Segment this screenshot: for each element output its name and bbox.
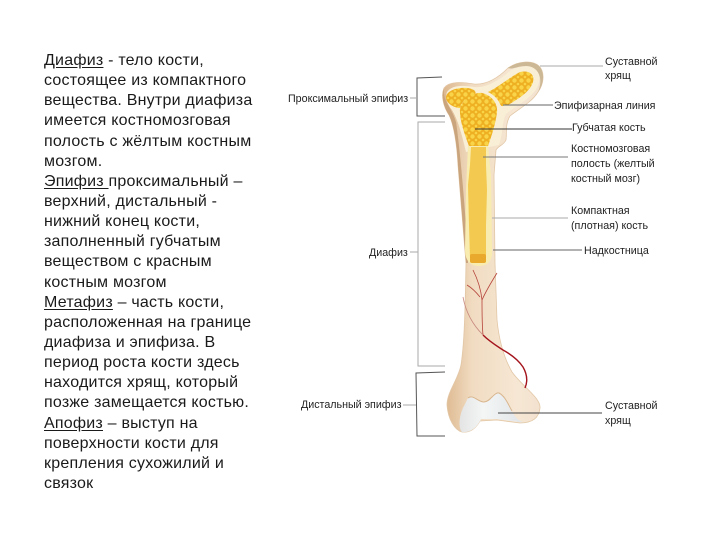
text block: bone part definitions: верхний, дистальный - <box>44 193 217 210</box>
text block: bone part definitions: вещества. Внутри диафиза <box>44 92 252 109</box>
text block: bone part definitions: расположенная на границе <box>44 314 251 331</box>
label: distal epiphysis: Дистальный эпифиз <box>301 399 402 411</box>
spongy bone: right lobe <box>488 71 533 106</box>
text block: bone part definitions: крепления сухожилий и <box>44 455 224 472</box>
articular cartilage distal <box>460 393 527 432</box>
leader lines <box>403 66 603 413</box>
text block: bone part definitions: позже замещается костью. <box>44 394 249 411</box>
label: periosteum: Надкостница <box>584 245 649 257</box>
label: medullary cavity: Костномозговая <box>571 143 650 155</box>
text block: bone part definitions: веществом с красным <box>44 253 212 270</box>
text block: bone part definitions <box>44 52 252 492</box>
marrow end <box>470 254 486 263</box>
left branch <box>467 285 480 297</box>
bracket: proximal epiphysis <box>417 77 445 116</box>
label: proximal epiphysis: Проксимальный эпифиз <box>288 93 408 105</box>
pale head interior <box>446 66 539 152</box>
text block: bone part definitions: состоящее из компактного <box>44 72 246 89</box>
label: diaphysis: Диафиз <box>369 247 408 259</box>
label: articular cartilage top: хрящ <box>605 70 631 82</box>
cartilage edge <box>468 393 512 411</box>
text block: bone part definitions: поверхности кости для <box>44 435 219 452</box>
text block: bone part definitions: Диафиз - тело кости, <box>44 52 204 69</box>
outer bone silhouette <box>443 62 543 432</box>
label: compact bone: (плотная) кость <box>571 220 648 232</box>
labels <box>288 56 658 427</box>
label: spongy bone: Губчатая кость <box>572 122 646 134</box>
blood vessels <box>463 270 527 388</box>
label: medullary cavity: полость (желтый <box>571 158 655 170</box>
spongy bone: central mass <box>460 93 497 150</box>
text block: bone part definitions: полость с жёлтым костным <box>44 133 251 150</box>
text block: bone part definitions: имеется костномозговая <box>44 112 231 129</box>
bone body <box>443 62 543 432</box>
bracket: diaphysis <box>418 122 445 366</box>
text block: bone part definitions: Апофиз – выступ на <box>44 415 198 432</box>
label: articular cartilage bottom: хрящ <box>605 415 631 427</box>
right branch <box>482 273 497 300</box>
text block: bone part definitions: заполненный губчатым <box>44 233 221 250</box>
bracket: distal epiphysis <box>416 372 445 436</box>
text block: bone part definitions: период роста кости здесь <box>44 354 240 371</box>
cortical wall shading <box>443 88 468 263</box>
text block: bone part definitions: диафиза и эпифиза. В <box>44 334 215 351</box>
label: compact bone: Компактная <box>571 205 630 217</box>
text block: bone part definitions: Метафиз – часть кости, <box>44 294 224 311</box>
medullary cavity pale zone <box>465 146 492 266</box>
text block: bone part definitions: нижний конец кости, <box>44 213 200 230</box>
yellow marrow <box>468 147 487 258</box>
text block: bone part definitions: находится хрящ, который <box>44 374 238 391</box>
label: medullary cavity: костный мозг) <box>571 173 640 185</box>
label: articular cartilage bottom: Суставной <box>605 400 658 412</box>
spongy bone: left lobe <box>446 88 476 108</box>
text block: bone part definitions: мозгом. <box>44 153 102 170</box>
label: articular cartilage top: Суставной <box>605 56 658 68</box>
main branch <box>473 270 483 335</box>
label: epiphyseal line: Эпифизарная линия <box>554 100 656 112</box>
nutrient artery <box>483 335 527 388</box>
outer thin branch <box>463 297 483 335</box>
head rim shading <box>508 62 543 92</box>
text block: bone part definitions: связок <box>44 475 93 492</box>
text block: bone part definitions: Эпифиз проксимальный – <box>44 173 243 190</box>
brackets <box>416 77 445 436</box>
text block: bone part definitions: костным мозгом <box>44 274 167 291</box>
